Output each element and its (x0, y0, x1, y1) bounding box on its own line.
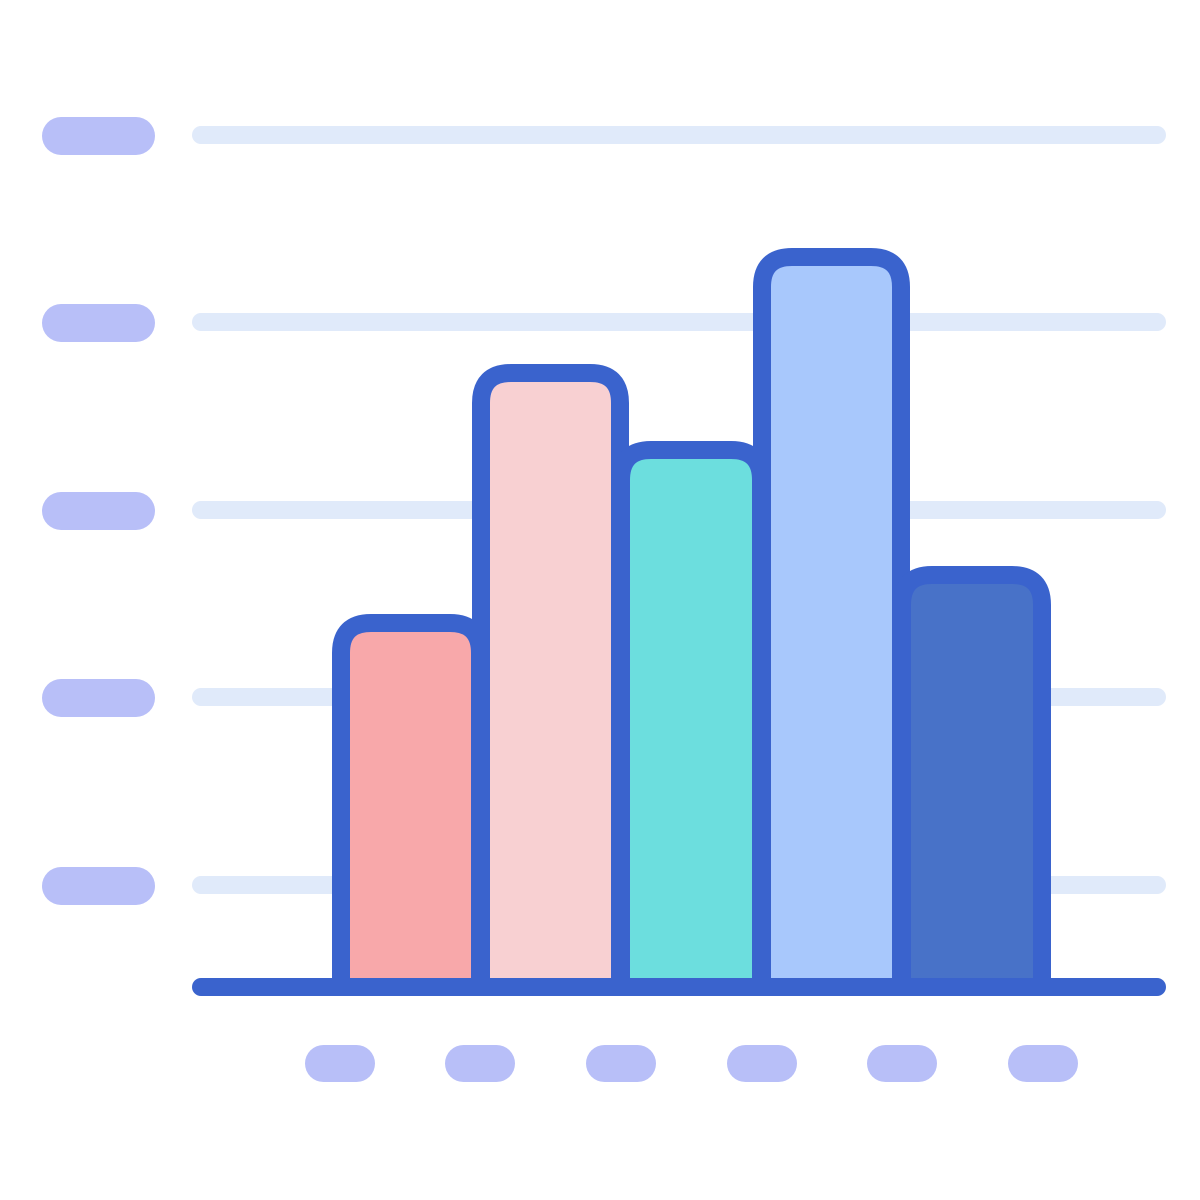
bar 1 (341, 623, 480, 987)
x-axis label pills (305, 1045, 1078, 1082)
y-axis label pills (42, 117, 155, 905)
bar 5 (902, 575, 1042, 987)
bar 4 (762, 257, 901, 987)
bar 2 (481, 373, 620, 987)
bar 3 (621, 450, 761, 987)
baseline axis (201, 978, 1157, 996)
bars (341, 257, 1042, 987)
